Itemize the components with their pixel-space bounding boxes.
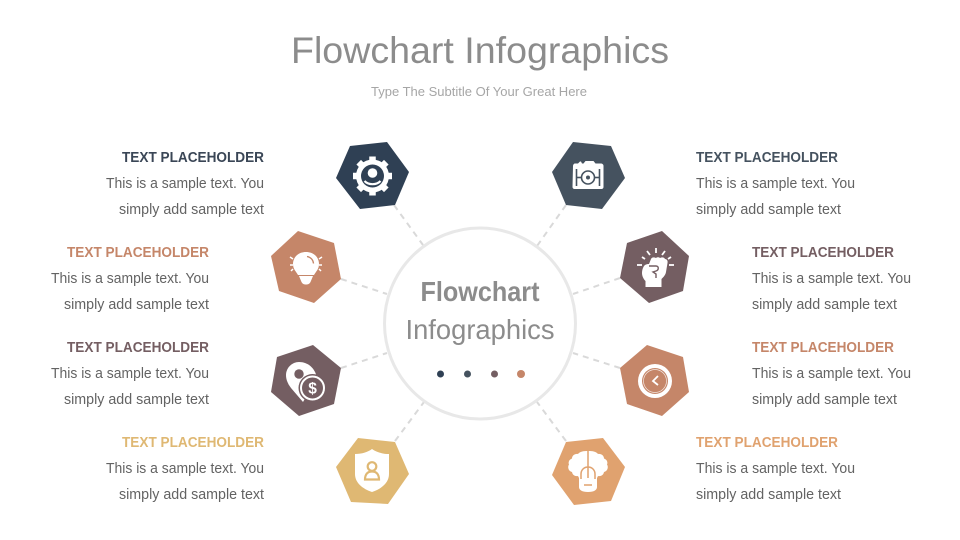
text block: right 4: TEXT PLACEHOLDER	[696, 435, 838, 451]
icon: camera	[572, 161, 604, 189]
text block: right 2: This is a sample text. You	[752, 271, 911, 287]
text block: right 1: TEXT PLACEHOLDER	[696, 150, 838, 166]
text block: left 3: TEXT PLACEHOLDER	[67, 340, 209, 356]
text block: right 1: simply add sample text	[696, 202, 841, 218]
text block: left 3	[51, 340, 209, 408]
node 2: light bulb icon	[271, 231, 341, 303]
circle subheading: Infographics	[406, 314, 554, 345]
text block: left 1	[106, 150, 264, 218]
icon: gear with user	[353, 156, 392, 196]
text block: left 4	[106, 435, 264, 503]
node 7: clock icon	[620, 345, 689, 416]
text block: right 3: TEXT PLACEHOLDER	[752, 340, 894, 356]
text block: right 3: This is a sample text. You	[752, 366, 911, 382]
text block: left 2: This is a sample text. You	[51, 271, 209, 287]
text block: right 2: TEXT PLACEHOLDER	[752, 245, 894, 261]
text block: right 3	[752, 340, 911, 408]
icon: brain with arrow	[568, 451, 608, 492]
text block: right 1	[696, 150, 855, 218]
circle heading: Flowchart	[420, 276, 540, 307]
text block: right 4: This is a sample text. You	[696, 461, 855, 477]
subtitle: Type The Subtitle Of Your Great Here	[371, 84, 587, 99]
icon: location pin with dollar: $	[308, 380, 317, 398]
text block: left 1: TEXT PLACEHOLDER	[122, 150, 264, 166]
text block: right 2: simply add sample text	[752, 297, 897, 313]
circle dots	[437, 370, 525, 378]
dashed connectors	[341, 205, 620, 441]
node 5: camera icon	[552, 142, 625, 209]
text block: left 2	[51, 245, 209, 313]
text block: right 1: This is a sample text. You	[696, 176, 855, 192]
text block: right 3: simply add sample text	[752, 392, 897, 408]
text block: left 2: TEXT PLACEHOLDER	[67, 245, 209, 261]
title: Flowchart Infographics	[291, 29, 669, 71]
icon: shield with person	[355, 449, 389, 492]
text block: right 4: simply add sample text	[696, 487, 841, 503]
text block: right 2	[752, 245, 911, 313]
node 1: gear user icon	[336, 142, 409, 209]
node 3: location money icon	[271, 345, 341, 416]
text block: left 1: This is a sample text. You	[106, 176, 264, 192]
node 8: brain bulb icon	[552, 438, 625, 505]
central circle	[384, 228, 576, 419]
text block: left 3: This is a sample text. You	[51, 366, 209, 382]
icon: light bulb	[290, 252, 322, 284]
text block: left 3: simply add sample text	[64, 392, 209, 408]
text block: left 4: This is a sample text. You	[106, 461, 264, 477]
icon: clock	[638, 364, 672, 398]
text block: right 4	[696, 435, 855, 503]
text block: left 1: simply add sample text	[119, 202, 264, 218]
text block: left 2: simply add sample text	[64, 297, 209, 313]
text block: left 4: simply add sample text	[119, 487, 264, 503]
node 4: shield user icon	[336, 438, 409, 504]
icon: raised fist	[637, 248, 674, 287]
text block: left 4: TEXT PLACEHOLDER	[122, 435, 264, 451]
node 6: fist icon	[620, 231, 689, 303]
